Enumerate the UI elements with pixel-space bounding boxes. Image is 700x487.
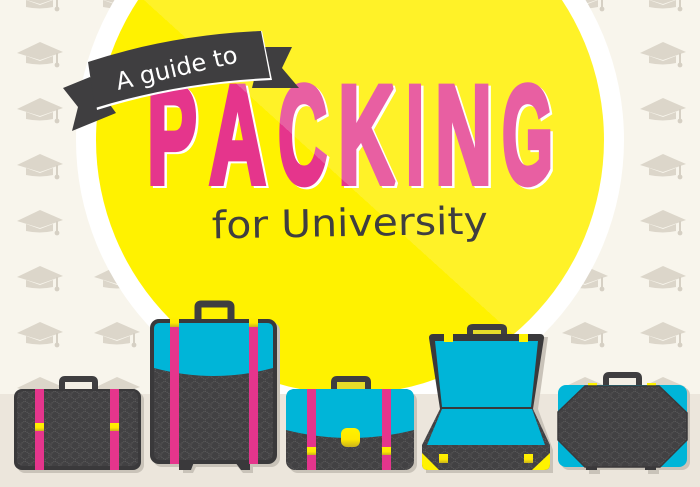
subtitle: for University: for University — [211, 199, 488, 247]
title: PACKING: P — [150, 58, 200, 215]
ribbon left tail — [63, 77, 116, 131]
suitcase 4: open case — [422, 327, 553, 473]
title: PACKING: A — [212, 58, 268, 215]
title: PACKING: N — [438, 58, 494, 215]
title: PACKING: C — [278, 56, 327, 213]
title: PACKING: I — [406, 56, 424, 213]
suitcase 1: dark case — [14, 379, 144, 473]
title: PACKING: K — [340, 58, 398, 215]
suitcase 2: tall upright case — [150, 304, 280, 473]
graduation cap pattern — [17, 0, 686, 402]
ribbon text: A guide to — [113, 41, 240, 96]
suitcase 5: case with blue corners — [558, 375, 690, 474]
base — [422, 409, 550, 470]
ribbon main band — [90, 31, 272, 110]
floor — [0, 394, 700, 487]
clasp — [341, 428, 360, 447]
infographic header: G — [502, 56, 553, 213]
ribbon banner — [63, 31, 299, 131]
infographic header: G — [504, 58, 556, 215]
yellow circle with white ring — [76, 0, 624, 414]
suitcase 3: briefcase with clasp — [286, 379, 417, 473]
title: PACKING: K — [338, 56, 395, 213]
title: PACKING: N — [435, 56, 492, 213]
ribbon right tail — [252, 47, 299, 88]
title: PACKING: C — [280, 58, 330, 215]
title: PACKING: I — [408, 58, 426, 215]
title: PACKING: A — [209, 56, 266, 213]
title: PACKING — [147, 56, 556, 215]
lid — [429, 334, 544, 409]
title: PACKING: P — [147, 56, 197, 213]
